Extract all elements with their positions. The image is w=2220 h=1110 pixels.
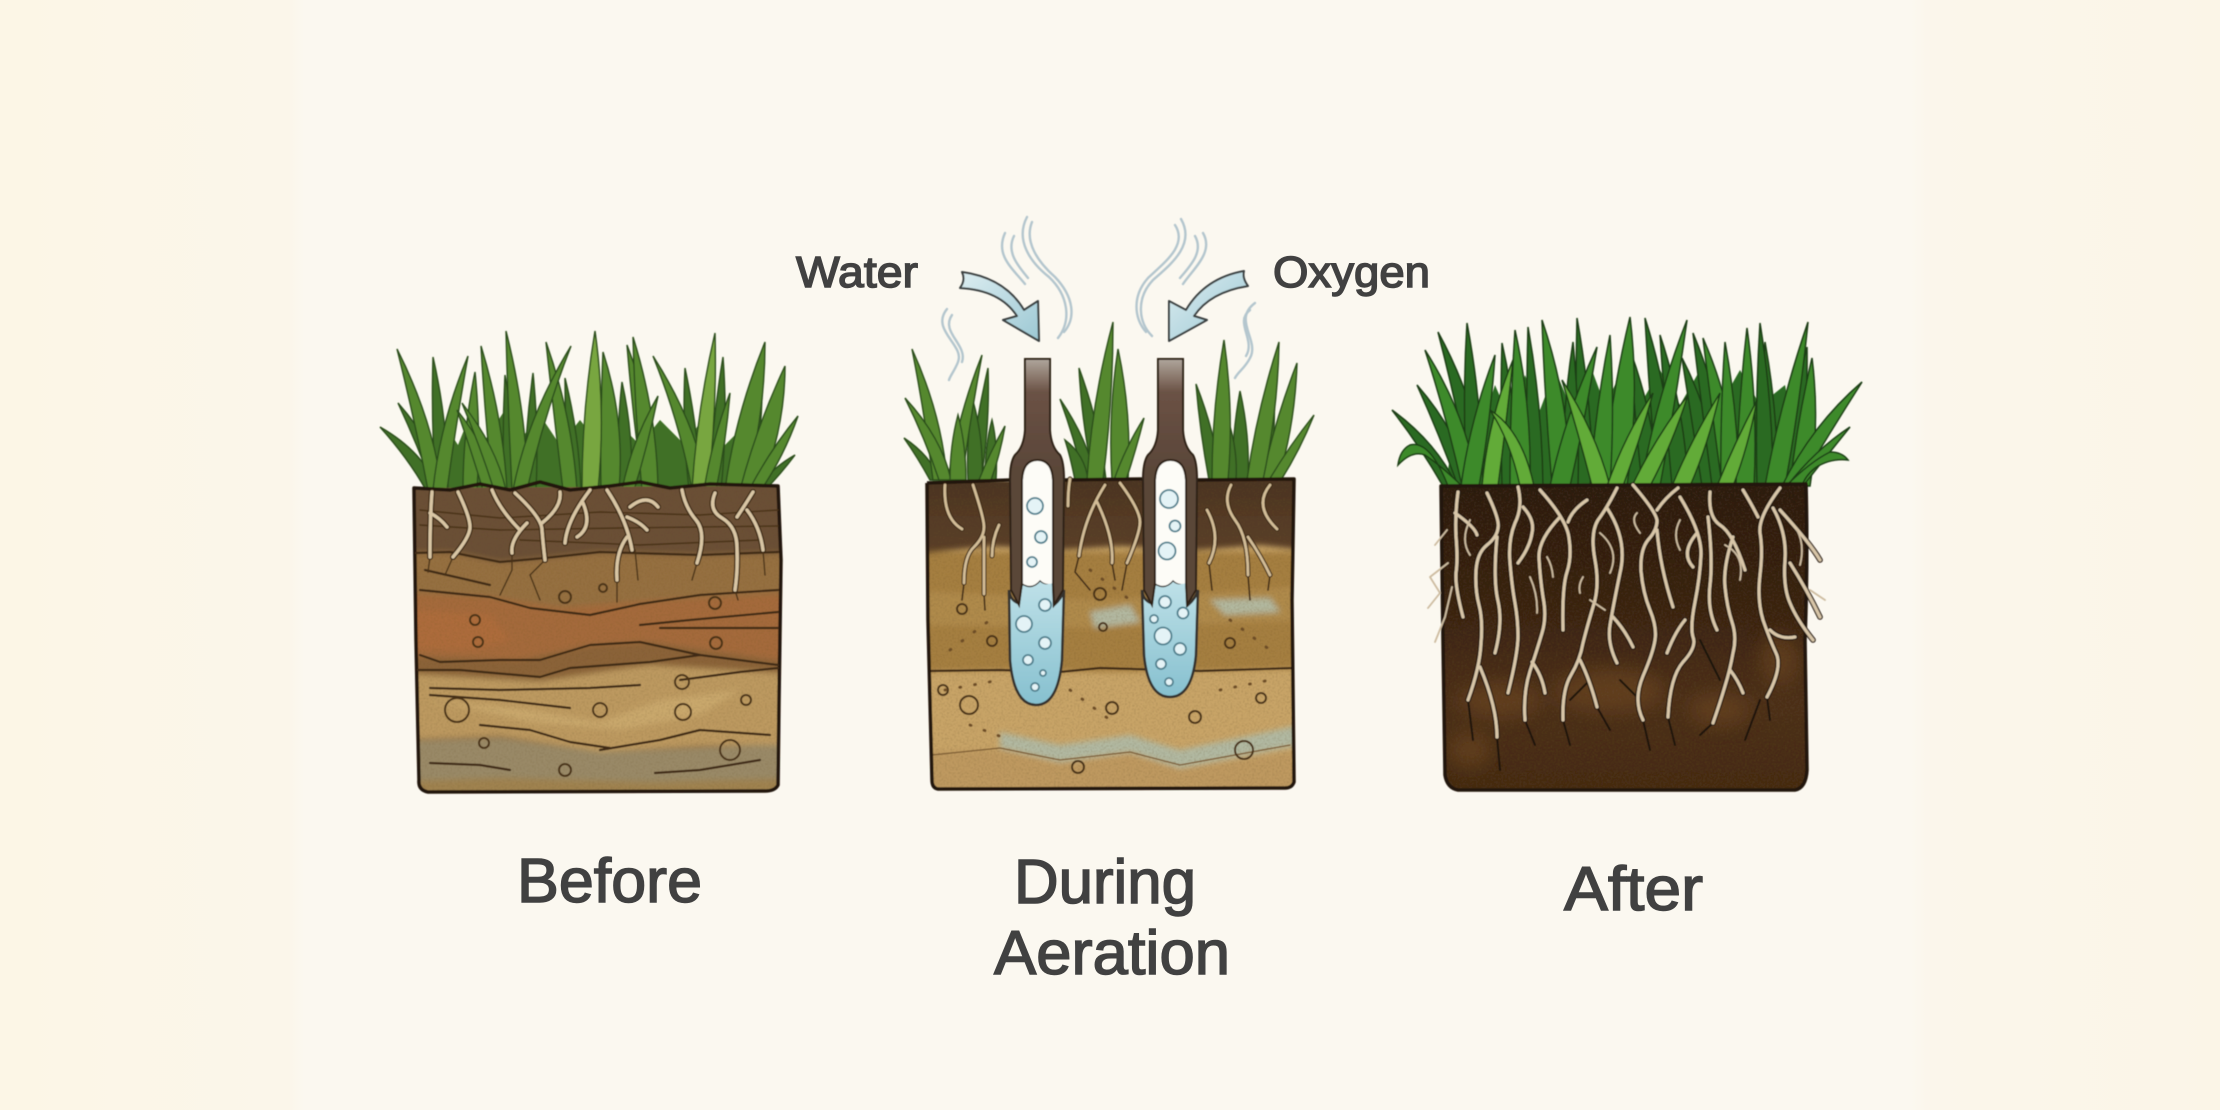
aeration tine: right: [1143, 359, 1197, 605]
grass: during middle clump: [1060, 322, 1144, 480]
roots: before: [430, 490, 763, 590]
soil: before: [415, 485, 780, 792]
roots: during: [945, 479, 1277, 594]
label: during aeration: During: [1014, 848, 1196, 917]
panel: after: [1392, 317, 1862, 795]
vapour wisps: left: [942, 217, 1071, 380]
grass: during left clump: [904, 349, 1005, 480]
soil outline: after: [1441, 484, 1807, 790]
soil: during: [928, 480, 1294, 788]
grass: during right clump: [1196, 340, 1314, 480]
thin dark rootlets: after: [1468, 640, 1770, 770]
grass: before: [380, 331, 798, 490]
roots: after: [1428, 485, 1825, 737]
vapour wisps: right: [1136, 219, 1255, 378]
panel: before: [380, 331, 810, 800]
aeration tine: left: [1010, 359, 1064, 605]
arrow: oxygen: [1169, 271, 1248, 341]
grass: after: [1392, 317, 1862, 486]
soil: after: [1435, 480, 1815, 795]
panel: during aeration: [900, 217, 1320, 800]
label: during aeration: Aeration: [994, 919, 1230, 988]
soil outline: during: [927, 479, 1294, 789]
arrow: water: [960, 272, 1039, 341]
label: water: Water: [796, 248, 918, 297]
water channel: left: [1009, 580, 1064, 705]
water channel: right: [1142, 580, 1198, 697]
bubbles: [1016, 490, 1188, 691]
label: oxygen: Oxygen: [1273, 248, 1430, 297]
label: before: Before: [517, 847, 702, 916]
soil layer lines: before: [415, 510, 778, 776]
label: after: After: [1564, 855, 1703, 924]
soil outline: before: [414, 482, 781, 792]
